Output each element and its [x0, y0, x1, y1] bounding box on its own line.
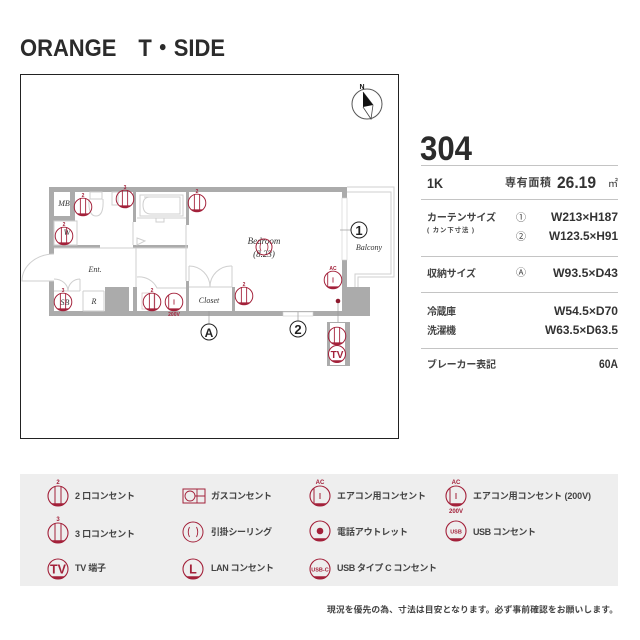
room labels: Bedroom: [248, 236, 281, 246]
plan outlets: 3: [62, 288, 65, 294]
storage size: [427, 267, 618, 280]
layout and area: ㎡: [608, 178, 618, 190]
room labels: R: [91, 297, 97, 306]
room labels: W: [64, 228, 72, 237]
legend: LAN outlet: LAN コンセント: [211, 563, 274, 573]
legend: AC 200V outlet: エアコン用コンセント (200V): [473, 491, 591, 501]
storage size: 収納サイズ: [427, 267, 476, 280]
callout: window 2: 2: [294, 322, 302, 337]
layout and area: 1K: [427, 175, 443, 191]
callout: window 1: 1: [355, 223, 363, 238]
legend: LAN outlet: [183, 559, 274, 579]
tv and outlet box: TV: [331, 350, 344, 361]
legend: telephone outlet: 電話アウトレット: [337, 526, 408, 537]
plan outlets: 200V: [168, 312, 180, 318]
room labels: (8.23): [253, 249, 275, 259]
appliance sizes: [427, 305, 619, 337]
legend: 3-gang outlet: 3 口コンセント: [75, 529, 135, 539]
layout and area: [427, 173, 618, 192]
legend: USB outlet: USB コンセント: [473, 527, 536, 537]
legend: USB-C outlet: USB-C: [311, 568, 329, 574]
legend: LAN outlet: L: [189, 562, 197, 576]
callout: closet A: [201, 311, 217, 340]
legend: ceiling fitting: 引掛シーリング: [211, 526, 272, 537]
curtain sizes: ②: [516, 231, 526, 243]
plan outlets: 2: [82, 193, 85, 199]
balcony outline: [347, 187, 394, 287]
footer note: 現況を優先の為、寸法は目安となります。必ず事前確認をお願いします。: [327, 604, 618, 614]
title: ORANGE T・SIDE: [20, 35, 225, 62]
layout and area: 専有面積: [505, 175, 551, 189]
legend: AC 200V outlet: 200V: [449, 509, 463, 515]
plan outlets: 2: [196, 189, 199, 195]
legend: telephone outlet: [310, 521, 408, 541]
curtain sizes: ( カン下寸法 ): [427, 225, 474, 234]
callout: window 1: [340, 222, 367, 238]
plan outlets: 2: [243, 282, 246, 288]
legend: USB outlet: USB: [450, 530, 462, 536]
plan outlets: 3: [124, 185, 127, 191]
icon: compass: N: [359, 84, 365, 91]
legend: 3-gang outlet: [48, 517, 135, 543]
plan outlets: AC: [329, 266, 337, 272]
bathtub: [137, 195, 186, 218]
legend: USB-C outlet: [310, 559, 437, 579]
appliance sizes: 冷蔵庫: [427, 305, 456, 318]
plan outlets: 2: [63, 222, 66, 228]
layout and area: 26.19: [557, 173, 596, 192]
breaker: ブレーカー表記: [427, 358, 496, 371]
toilet: [89, 192, 103, 216]
floor plan walls: [22, 187, 394, 316]
plan outlets: 2: [151, 288, 154, 294]
breaker: 60A: [599, 359, 618, 371]
panel: legend: [20, 474, 618, 586]
room labels: SB: [61, 298, 70, 307]
panel: floor plan frame: [20, 74, 398, 438]
curtain sizes: W123.5×H91: [549, 231, 619, 243]
legend: USB outlet: [446, 521, 536, 541]
callout: closet A: A: [205, 326, 214, 340]
legend: 2-gang outlet: 2 口コンセント: [75, 491, 135, 501]
room labels: Balcony: [356, 243, 383, 252]
legend: AC outlet: [310, 480, 426, 506]
legend: gas outlet: [183, 489, 272, 503]
panel: unit details: [420, 130, 619, 371]
ceiling fitting: [256, 239, 272, 255]
curtain sizes: [427, 211, 619, 243]
phone outlet dot: [336, 299, 340, 322]
legend: ceiling fitting: [183, 522, 272, 542]
legend: 2-gang outlet: [48, 480, 135, 506]
legend: AC outlet: AC: [316, 480, 325, 486]
room labels: [57, 199, 383, 307]
legend: USB-C outlet: USB タイプ C コンセント: [337, 562, 437, 573]
plan outlets: [54, 185, 342, 318]
room labels: MB: [57, 199, 70, 208]
curtain sizes: カーテンサイズ: [427, 211, 496, 224]
curtain sizes: ①: [516, 212, 526, 224]
legend: AC 200V outlet: AC: [452, 480, 461, 486]
legend: gas outlet: ガスコンセント: [211, 490, 272, 501]
legend: TV terminal: TV: [50, 562, 67, 576]
closet doors: [189, 266, 232, 287]
appliance sizes: 洗濯機: [427, 324, 456, 337]
entrance door: [22, 254, 54, 281]
storage size: Ⓐ: [516, 267, 526, 279]
breaker: [427, 358, 618, 371]
icon: compass: [352, 84, 382, 119]
legend: 3-gang outlet: 3: [56, 517, 60, 523]
room labels: Closet: [199, 296, 220, 305]
tv and outlet box: [327, 322, 350, 366]
kitchen door: [137, 277, 186, 288]
room number: 304: [420, 130, 472, 168]
appliance sizes: W54.5×D70: [554, 306, 618, 318]
legend: TV terminal: TV 端子: [75, 562, 106, 573]
legend: AC outlet: エアコン用コンセント: [337, 491, 426, 501]
legend: AC 200V outlet: [446, 480, 591, 515]
legend: 2-gang outlet: 2: [56, 480, 60, 486]
shoebox doors: [54, 279, 80, 291]
curtain sizes: W213×H187: [551, 212, 618, 224]
legend: TV terminal: [48, 559, 106, 579]
appliance sizes: W63.5×D63.5: [545, 325, 619, 337]
room labels: Ent.: [87, 265, 102, 274]
storage size: W93.5×D43: [553, 268, 618, 280]
callout: window 2: [290, 312, 306, 337]
